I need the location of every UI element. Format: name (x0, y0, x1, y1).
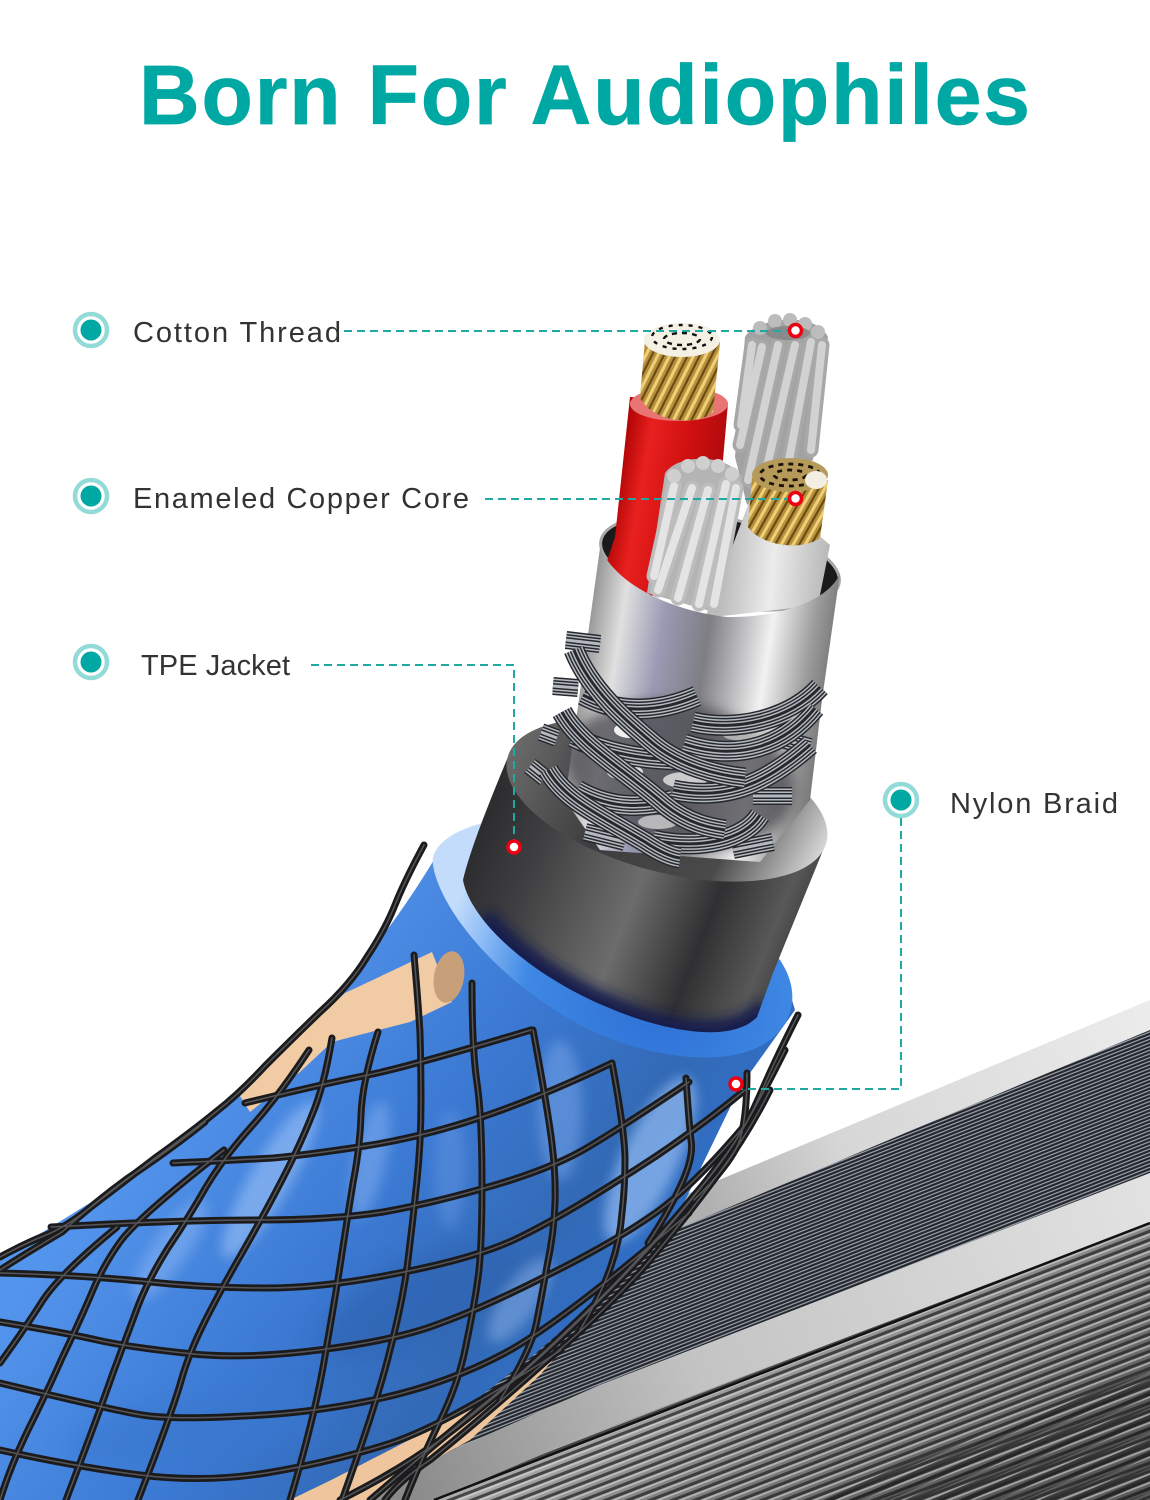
cotton filler, upper piece (240, 949, 468, 1112)
ribbed platform surface (300, 1000, 1150, 1500)
leader line (311, 665, 514, 842)
label: Cotton Thread (133, 317, 341, 349)
blue flange collar (433, 780, 792, 1058)
braid end tabs (530, 640, 810, 850)
title: Born For Audiophiles (139, 48, 1030, 142)
marker dot (790, 324, 802, 336)
label: Enameled Copper Core (133, 483, 469, 515)
marker dot (508, 841, 520, 853)
platform top light edge (560, 1000, 1150, 1300)
bullet icon (75, 646, 107, 678)
platform dark fine ribs (300, 1030, 1150, 1500)
platform middle light band (340, 1173, 1150, 1500)
nylon braid net (0, 845, 798, 1500)
callout: Enameled Copper Core (75, 480, 802, 515)
callout: Nylon Braid (730, 784, 1118, 1090)
leader line (344, 330, 790, 332)
white wire with gold core (706, 458, 830, 616)
white cotton thread bundle, front (647, 456, 742, 613)
jacket top face (489, 688, 845, 912)
grey cotton thread bundle, back (735, 313, 828, 505)
cable illustration (0, 313, 864, 1500)
bullet icon (885, 784, 917, 816)
cotton filler, lower edge (290, 1340, 570, 1500)
blue cable body (0, 850, 795, 1500)
red insulated wire with gold core (607, 323, 728, 596)
marker dot (730, 1078, 742, 1090)
marker dot (790, 492, 802, 504)
silver shield, inner back rim (593, 498, 847, 626)
leader line (741, 818, 901, 1089)
bullet icon (75, 314, 107, 346)
label: Nylon Braid (950, 788, 1118, 820)
leader line (485, 498, 790, 500)
metal braided shield (530, 640, 820, 858)
platform lower wide ribs (434, 1223, 1150, 1500)
label: TPE Jacket (141, 650, 290, 682)
silver foil shield (565, 548, 840, 862)
shadow inside braid area (553, 681, 807, 869)
bullet icon (75, 480, 107, 512)
callout: Cotton Thread (75, 314, 802, 349)
callout: TPE Jacket (75, 646, 520, 853)
braid horizontal strands (573, 687, 820, 844)
black TPE jacket (463, 722, 828, 1032)
braid diagonal strands (548, 650, 745, 858)
